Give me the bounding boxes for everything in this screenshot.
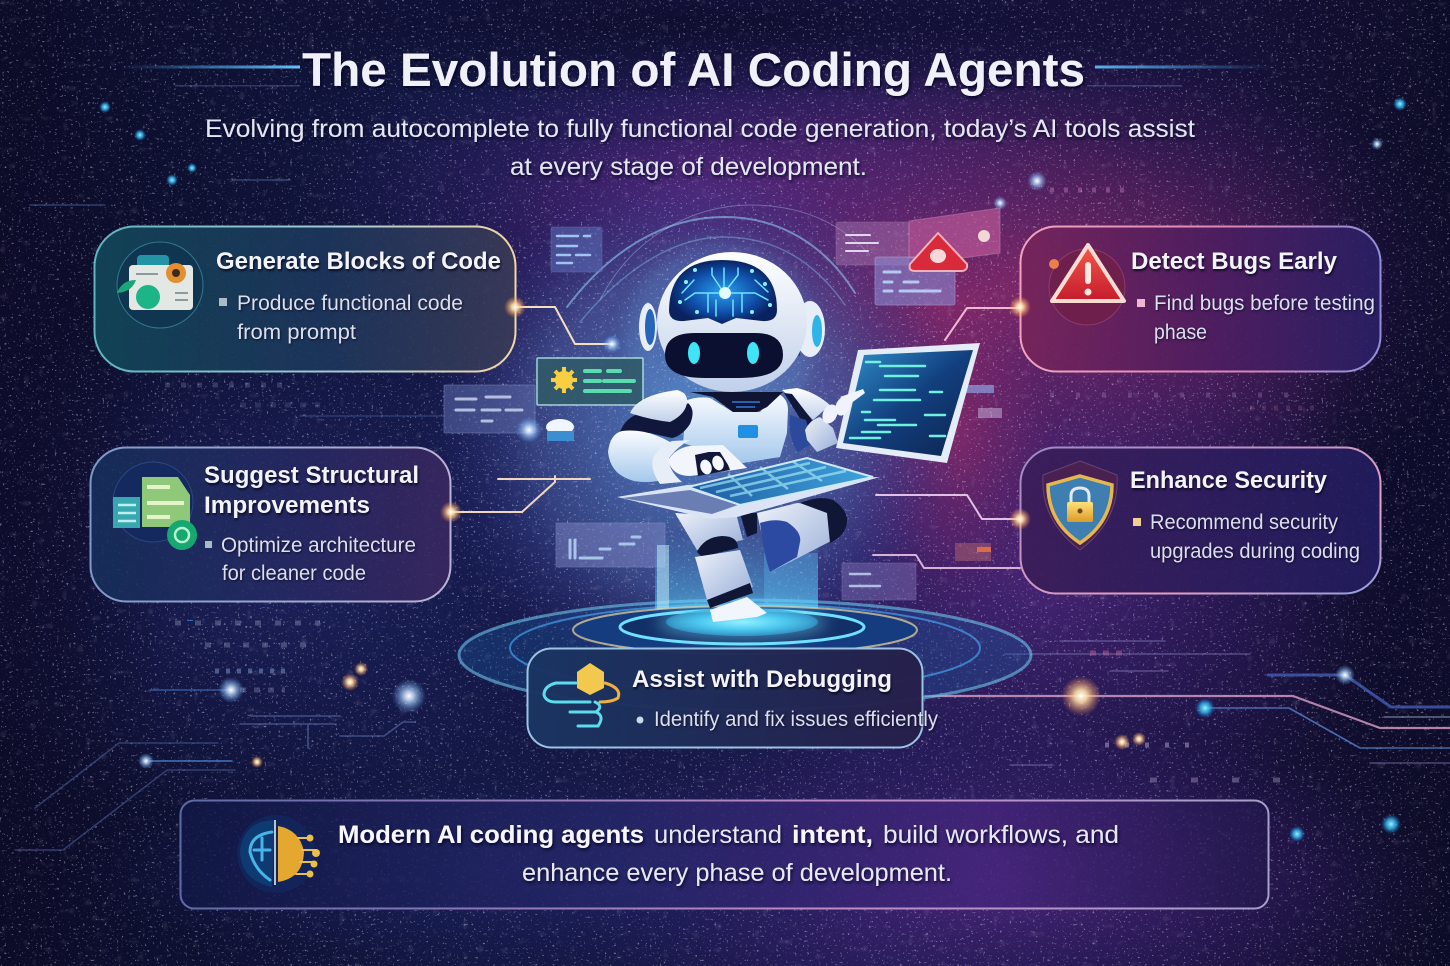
summary text: enhance every phase of development. <box>522 859 952 887</box>
card 4 bullet text: upgrades during coding <box>1150 540 1360 563</box>
connector nodes on card edges <box>440 296 1031 530</box>
icon: sun gear <box>551 367 577 393</box>
card 2 heading <box>204 462 419 519</box>
chest badge <box>738 425 758 438</box>
left arm and typing hand <box>608 390 747 484</box>
icon: shield and lock <box>1043 461 1117 550</box>
card 3 bullet text <box>1137 292 1375 344</box>
icon: debugging loops <box>544 663 619 726</box>
arrow: card 3 to robot <box>945 308 1020 340</box>
brain dome <box>669 260 777 324</box>
torso <box>683 392 788 463</box>
card 2 bullet text: Optimize architecture <box>221 534 416 557</box>
panel: code bottom right <box>842 563 916 600</box>
summary text: build workflows, and <box>883 821 1119 849</box>
eyes <box>688 342 759 364</box>
subtitle: Evolving from autocomplete to fully functional code generation, today’s AI tools assist <box>205 115 1195 143</box>
card 4 bullet text: Recommend security <box>1150 511 1338 534</box>
summary text: understand <box>654 821 782 849</box>
title: The Evolution of AI Coding Agents <box>302 43 1085 96</box>
card 2 heading: Improvements <box>204 492 370 519</box>
card: Enhance Security <box>1020 448 1380 594</box>
right arm and pointing hand <box>782 388 865 452</box>
card 1 bullet text <box>219 292 463 344</box>
glowing light points <box>99 97 1407 842</box>
card: Assist with Debugging <box>528 648 938 748</box>
holographic arcs behind robot <box>567 205 870 440</box>
card 1 heading: Generate Blocks of Code <box>216 248 501 275</box>
card 4 heading: Enhance Security <box>1130 467 1328 494</box>
card 3 bullet text: Find bugs before testing <box>1154 292 1375 315</box>
summary text <box>338 821 1119 887</box>
card: Generate Blocks of Code <box>94 226 516 372</box>
connector lines <box>451 307 1020 568</box>
icon: structured documents <box>113 462 197 550</box>
icon: cloud <box>546 419 574 441</box>
icon: code document <box>117 242 203 328</box>
arrow: card 1 to robot <box>516 307 621 353</box>
panel: pink tilted <box>909 208 1000 258</box>
card 5 heading: Assist with Debugging <box>632 666 892 693</box>
visor <box>665 333 783 378</box>
floating code panels <box>444 208 1002 600</box>
title accent lines <box>120 66 1275 86</box>
card: Detect Bugs Early <box>1020 226 1380 372</box>
card 1 bullet text: from prompt <box>237 321 356 344</box>
summary text: intent, <box>792 821 873 849</box>
card 3 heading: Detect Bugs Early <box>1131 248 1338 275</box>
summary text: Modern AI coding agents <box>338 821 644 849</box>
subtitle: at every stage of development. <box>510 153 867 181</box>
card 5 bullet text: Identify and fix issues efficiently <box>654 708 938 731</box>
card 3 bullet text: phase <box>1154 321 1207 344</box>
icon: red bug warning <box>910 233 967 271</box>
laptop base <box>617 458 880 519</box>
panel: flowchart bottom <box>556 523 665 567</box>
card 2 bullet text: for cleaner code <box>222 562 366 585</box>
robot <box>608 252 980 622</box>
panel: green code with sun <box>537 358 643 405</box>
arrow: card 4 to robot <box>873 495 1020 568</box>
panel: code top right <box>836 222 909 265</box>
arrow: card 2 to robot <box>451 476 590 512</box>
bent leg <box>740 498 847 572</box>
card 2 heading: Suggest Structural <box>204 462 419 489</box>
icon: half circuit brain <box>237 815 320 893</box>
card: Suggest Structural Improvements <box>90 448 450 602</box>
tablet <box>836 343 980 463</box>
background circuit traces <box>15 180 1450 850</box>
standing leg <box>675 513 767 622</box>
subtitle <box>205 115 1195 181</box>
card 4 bullet text <box>1133 511 1360 563</box>
card 2 bullet text <box>205 534 416 585</box>
panel: code top left <box>551 227 602 272</box>
ear left <box>639 303 657 351</box>
holographic platform <box>459 533 1031 710</box>
background pixel rows <box>165 190 1320 880</box>
panel: code left <box>444 385 535 433</box>
head <box>639 252 825 392</box>
icon: warning triangle <box>1049 245 1125 325</box>
callout: summary banner <box>180 800 1268 908</box>
card 1 bullet text: Produce functional code <box>237 292 463 315</box>
panel: code lower right <box>875 257 955 305</box>
ear right <box>794 301 825 357</box>
small right panels <box>955 385 1002 561</box>
